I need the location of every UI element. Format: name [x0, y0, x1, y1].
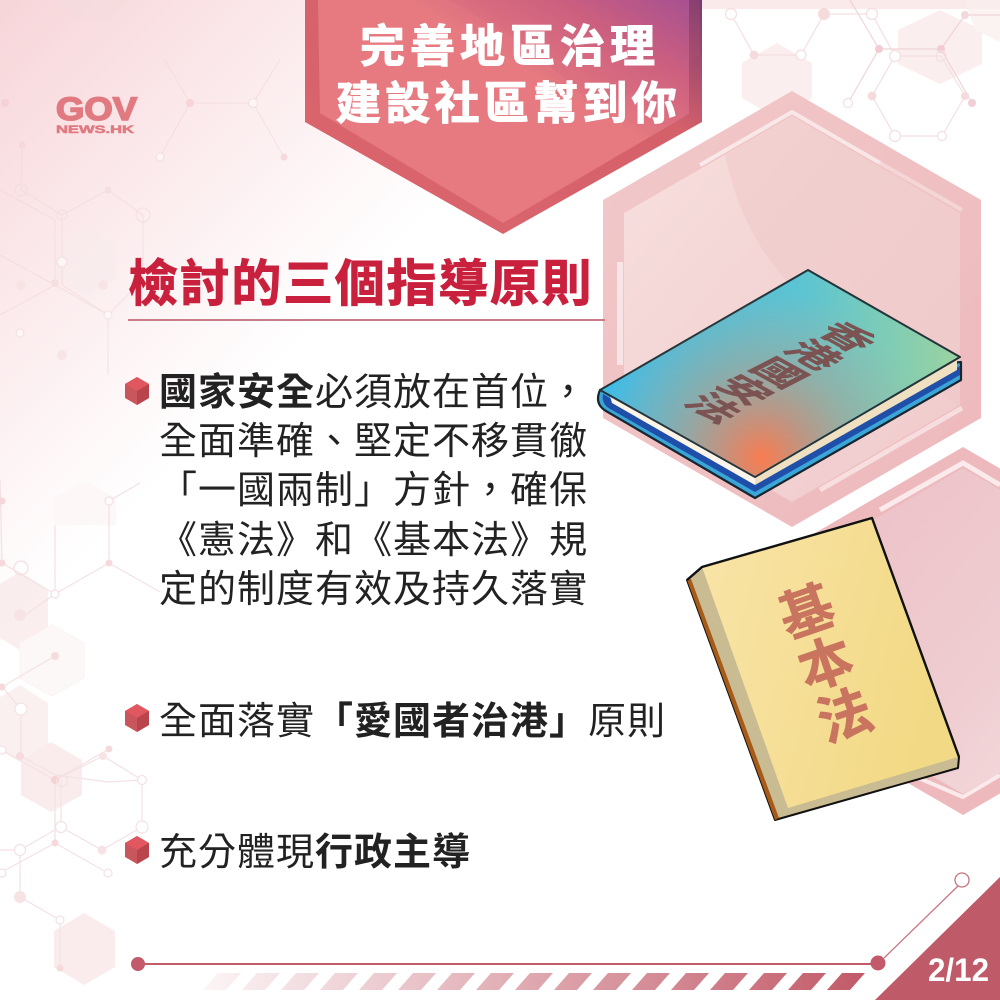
title text: [336, 21, 681, 129]
bullet text: national security: [159, 372, 588, 611]
bullet group 2: [125, 701, 666, 743]
book 2 cover lettering: 法: [810, 680, 880, 754]
logo: GOV NEWS.HK: [56, 91, 138, 136]
decorative hexagon behind basic law book: [803, 447, 1000, 815]
book 2 cover lettering: 本: [791, 628, 861, 702]
bullet group 1: [125, 372, 588, 611]
logo: GOV NEWS.HK: NEWS.HK: [56, 124, 134, 136]
decorative hexagon behind national security law book: [603, 91, 981, 527]
book 2 cover lettering: [772, 576, 880, 754]
page number corner: [875, 877, 1000, 1000]
icon: cube bullet: [125, 704, 149, 732]
footer decoration: [131, 873, 969, 990]
illustration: national security law book: [598, 270, 961, 498]
title text: 建設社區幫到你: [336, 78, 681, 129]
bullet group 3: [125, 832, 471, 874]
book 1 cover lettering: 港: [774, 334, 852, 376]
book 2 cover lettering: 基: [772, 576, 842, 650]
book 1 cover lettering: 安: [706, 369, 784, 411]
logo: GOV NEWS.HK: GOV: [56, 91, 138, 127]
icon: cube bullet: [125, 836, 149, 864]
bullet text: national security: 定的制度有效及持久落實: [159, 569, 588, 611]
book 1 cover lettering: 香: [808, 316, 886, 358]
bullet text: national security: 全面準確、堅定不移貫徹: [159, 421, 588, 463]
title banner: [305, 0, 702, 234]
heading: 檢討的三個指導原則: [128, 256, 593, 312]
title text: 完善地區治理: [360, 21, 660, 72]
book 1 cover lettering: 國: [740, 352, 818, 394]
illustration: basic law book: [687, 518, 959, 820]
book 1 cover lettering: [674, 316, 886, 429]
book 1 cover lettering: 法: [674, 387, 752, 429]
bullet text: national security: 「一國兩制」方針，確保: [159, 470, 588, 512]
background hexagon network: lower left: [0, 480, 160, 985]
background hexagon network: top right: [726, 0, 1000, 142]
page number: 2/12: [928, 952, 989, 988]
striped band: [203, 973, 865, 990]
bullet text: national security: 國家安全必須放在首位，: [159, 372, 588, 414]
bullet text: patriots: 全面落實「愛國者治港」原則: [159, 701, 666, 743]
bullet text: executive-led: 充分體現行政主導: [159, 832, 471, 874]
background hexagon network: upper left: [0, 0, 288, 375]
bullet text: national security: 《憲法》和《基本法》規: [159, 520, 588, 562]
icon: cube bullet: [125, 377, 149, 405]
